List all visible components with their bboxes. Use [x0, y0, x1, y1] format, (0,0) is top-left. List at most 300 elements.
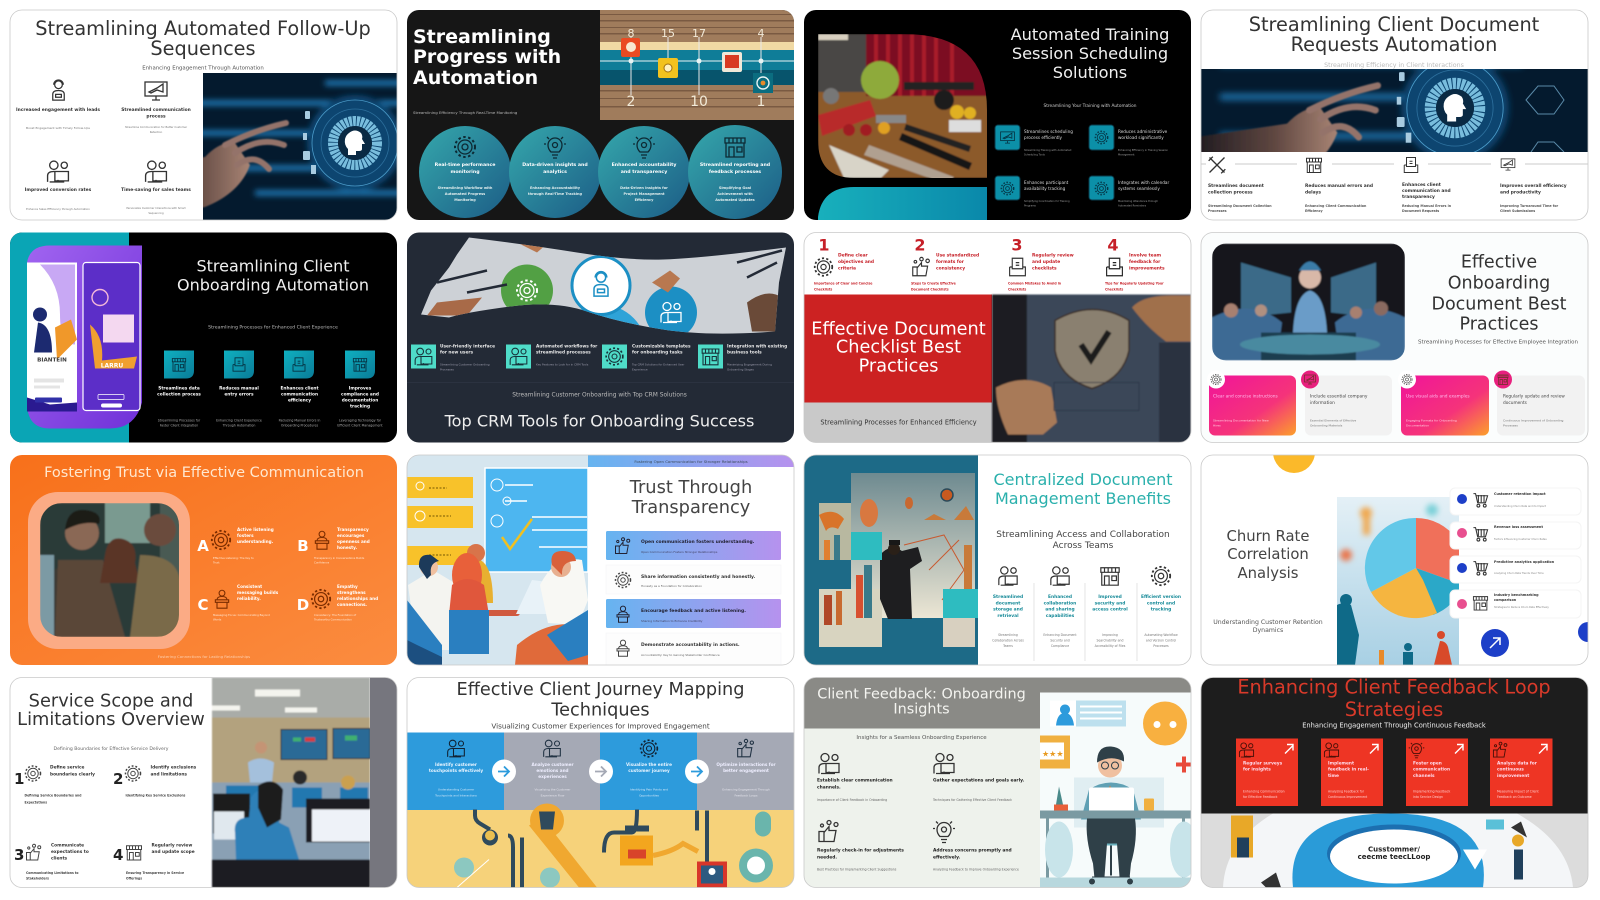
card note: Implementing Feedback: [1413, 790, 1450, 794]
card note: for Effective Feedback: [1243, 795, 1278, 799]
feature text: Improves: [349, 386, 372, 392]
row note: Sharing Information to Enhance Credibility: [641, 619, 703, 623]
icon: store: [1473, 597, 1488, 610]
image: hand touching support hologram: [1195, 41, 1588, 198]
title: Checklist Best: [836, 338, 961, 358]
benefit note: Boost Engagement with Timely Follow-Ups: [26, 126, 90, 130]
icon: hand with chart: [913, 257, 929, 276]
number: 3: [14, 846, 24, 864]
item note: Stakeholders: [26, 876, 49, 880]
benefit text: Increased engagement with leads: [16, 107, 100, 113]
step text: checklists: [1032, 266, 1057, 272]
subtitle: Defining Boundaries for Effective Service Delivery: [54, 746, 169, 752]
feature note: Streamlining Customer Onboarding: [440, 362, 490, 366]
item text: Active listening: [237, 527, 274, 532]
icon tile: [995, 176, 1020, 200]
benefit note: Compliance: [1051, 644, 1069, 648]
feature note: Top CRM Solutions for Enhanced User: [631, 362, 685, 366]
title: Session Scheduling: [1012, 44, 1168, 63]
subtitle: Insights for a Seamless Onboarding Experience: [856, 735, 987, 741]
icon: [510, 348, 527, 365]
item 3: [14, 842, 89, 880]
card note: Essential Elements of Effective: [1310, 418, 1356, 422]
icon tile: [995, 125, 1020, 150]
insight: channels: [817, 754, 893, 802]
benefit: communication: [121, 82, 191, 134]
arrow: [1370, 744, 1378, 754]
benefit text: document: [996, 600, 1020, 606]
ring caption: Cusstommer/: [1368, 846, 1420, 854]
item note: Defining Service Boundaries and: [24, 794, 81, 798]
card note: Documentation: [1406, 424, 1429, 428]
item note: Enhancing Client Communication: [1305, 204, 1367, 208]
feature text: Automated workflows for: [536, 344, 598, 350]
row note: Honesty as a Foundation for Collaboration: [641, 584, 702, 588]
item text: Streamlines document: [1208, 183, 1264, 189]
icon: [215, 590, 229, 608]
benefit note: Security and: [1050, 638, 1070, 642]
card note: Feedback on Outcome: [1497, 795, 1532, 799]
step note: Project Management: [624, 192, 665, 196]
step circle: monitoring: [419, 126, 511, 218]
illustration: phone screens: [27, 246, 142, 428]
edge button: [1578, 622, 1598, 642]
title: Centralized Document: [993, 470, 1173, 489]
step note: Visualizing the Customer: [534, 788, 571, 792]
step 4: [1105, 236, 1165, 292]
step note: Experience Flow: [541, 794, 565, 798]
icon: cart: [1473, 562, 1488, 575]
row note: Accountability: Key to Gaining Stakeholder Confidence: [641, 653, 720, 657]
subtitle: Enhancing Engagement Through Automation: [142, 66, 264, 72]
subtitle band: [804, 402, 992, 442]
step text: Data-driven insights and: [522, 162, 588, 168]
benefit text: Improved: [1098, 594, 1122, 600]
icon: [126, 766, 140, 781]
card text: Regular surveys: [1243, 760, 1283, 766]
feature text: Streamlines scheduling: [1024, 129, 1073, 134]
item note: Offerings: [126, 876, 142, 880]
list card: benchmarking: [1450, 590, 1581, 618]
ring caption: ceecme teecLLoop: [1358, 853, 1430, 861]
item text: Reduces manual errors and: [1305, 183, 1373, 189]
card: analyze data: [1490, 738, 1552, 806]
row note: Open Communication Fosters Stronger Relationships: [641, 550, 718, 554]
insight text: Gather expectations and goals early.: [933, 778, 1025, 784]
item note: Words: [213, 618, 222, 622]
icon: gear head: [815, 258, 832, 276]
title: Client Feedback: Onboarding: [817, 686, 1026, 702]
step note: Streamlining Workflow with: [438, 186, 493, 190]
step text: emotions and: [536, 768, 569, 773]
panel: Streamlining Automated Follow-Up Sequences: [16, 20, 397, 220]
item text: Improves overall efficiency: [1500, 183, 1567, 189]
icon: extinguisher: [1010, 258, 1025, 276]
card text: Revenue loss assessment: [1494, 525, 1543, 529]
item note: Improving Turnaround Time for: [1500, 204, 1558, 208]
feature text: workload significantly: [1118, 135, 1164, 140]
step text: Real-time performance: [435, 162, 495, 168]
icon: agent with laptop: [48, 161, 68, 182]
feature note: Maximizing Attendance through: [1118, 199, 1158, 203]
title: Streamlining Automated Follow-Up: [35, 17, 371, 40]
feature note: Experience: [632, 368, 648, 372]
arrow 1: [492, 760, 516, 784]
subtitle: Streamlining Efficiency Through Real-Time Monitoring: [413, 110, 518, 115]
insight note: Importance of Client Feedback in Onboarding: [817, 798, 887, 802]
title: Transparency: [631, 497, 750, 518]
item text: Identify exclusions: [150, 764, 197, 770]
step note: Feedback Loops: [734, 794, 758, 798]
panel: Streamlining Client Document Requests Automation: [1195, 10, 1588, 220]
title: Fostering Trust via Effective Communication: [44, 465, 364, 481]
arrow: [1285, 744, 1293, 754]
feature text: Integration with existing: [727, 344, 787, 350]
step note: Understanding Customer: [438, 788, 475, 792]
item note: Ensuring Transparency in Service: [126, 871, 184, 875]
card text: time: [1328, 773, 1339, 779]
icon tile: [411, 344, 436, 368]
icon: [1001, 132, 1014, 143]
item text: transparency: [1402, 194, 1435, 200]
step note: Automated Updates: [715, 198, 755, 202]
step text: Regularly review: [1032, 252, 1074, 258]
feature note: Streamlining Processes for: [158, 418, 201, 422]
title: Service Scope and: [29, 690, 193, 712]
icon: [233, 358, 245, 371]
feature text: availability tracking: [1024, 186, 1066, 191]
benefit text: Efficient version: [1141, 594, 1181, 600]
card note: Engaging Formats for Onboarding: [1406, 418, 1457, 422]
benefit text: access control: [1092, 607, 1128, 613]
feature note: Reducing Manual Errors in: [279, 418, 320, 422]
feature note: Management: [1118, 152, 1134, 156]
feature text: for onboarding tasks: [632, 350, 683, 356]
benefit note: Enhancing Document: [1043, 633, 1077, 637]
subtitle: Streamlining Your Training with Automation: [1043, 103, 1137, 109]
item note: Communicating Limitations to: [26, 871, 79, 875]
step text: Involve team: [1129, 252, 1162, 258]
icon: [1001, 182, 1014, 195]
item text: connections.: [337, 602, 367, 607]
step note: Importance of Clear and Concise: [814, 282, 872, 286]
step text: Analyze customer: [531, 762, 574, 767]
card text: feedback in real-: [1328, 767, 1369, 773]
image: timeline on wood: [600, 10, 794, 120]
row text: Open communication fosters understanding.: [641, 539, 755, 545]
subtitle: Streamlining Access and Collaboration: [996, 530, 1170, 540]
insight: concerns: [933, 822, 1019, 872]
card text: Regularly update and review: [1503, 394, 1565, 400]
item text: understanding.: [237, 539, 274, 544]
icon badge: [1207, 370, 1225, 388]
step note: Steps to Create Effective: [911, 282, 956, 286]
icon: [1498, 375, 1508, 384]
icon tile: [506, 344, 531, 368]
panel: Service Scope and Limitations Overview: [10, 678, 397, 888]
step note: Document Checklists: [911, 288, 949, 292]
panel: Client Feedback: Onboarding Insights: [804, 678, 1198, 888]
step 3: [1008, 236, 1074, 292]
step band 1: [407, 732, 504, 810]
benefit note: Sequencing: [148, 211, 164, 215]
card: review: [1494, 370, 1585, 436]
title: Insights: [893, 702, 950, 718]
insight note: Analyzing Feedback to Improve Onboarding Experience: [933, 868, 1019, 872]
feature note: Efficient Client Management: [337, 424, 383, 428]
feature: templates: [602, 344, 691, 372]
step text: improvements: [1129, 266, 1165, 272]
feature note: Simplifying Coordination for Training: [1024, 199, 1070, 203]
panel: Centralized Document Management Benefits: [804, 455, 1191, 665]
item text: Consistent: [237, 584, 262, 589]
step note: Enhancing Engagement Through: [722, 788, 770, 792]
icon: [616, 538, 630, 554]
card: visual aids: [1398, 370, 1489, 436]
step note: Opportunities: [639, 794, 659, 798]
feature: data collection: [157, 350, 201, 428]
card text: Include essential company: [1310, 394, 1368, 400]
step note: Automated Progress: [445, 192, 485, 196]
benefit text: retrieval: [997, 613, 1019, 619]
letter: A: [197, 537, 209, 555]
item note: Efficiency: [1305, 209, 1324, 213]
item text: Regularly review: [152, 842, 192, 848]
card text: improvement: [1497, 773, 1529, 779]
item text: relationships and: [337, 596, 378, 601]
panel: Top CRM Tools for Onboarding Success: [407, 232, 794, 442]
benefit: engagement: [16, 80, 100, 130]
icon tile: [698, 344, 723, 368]
image: timeline on wood: 2: [627, 94, 635, 110]
benefit: version control: [1141, 567, 1181, 648]
step note: Data-Driven Insights for: [620, 186, 668, 190]
subtitle: Streamlining Processes for Effective Employee Integration: [1418, 340, 1578, 346]
card note: Strategies to Reduce Churn Rate Effectively: [1494, 605, 1549, 609]
item: collection: [1208, 157, 1272, 213]
insight text: effectively.: [933, 854, 961, 860]
image: collage, analyst with charts: [819, 473, 978, 647]
feature text: business tools: [727, 350, 762, 356]
item text: fosters: [237, 533, 254, 538]
image: timeline on wood: 1: [757, 94, 765, 110]
title: Streamlining Client Document: [1249, 13, 1540, 36]
insight text: Establish clear communication: [817, 778, 893, 784]
feature note: Onboarding Stages: [727, 368, 754, 372]
item text: reliability.: [237, 596, 261, 601]
icon: [999, 567, 1017, 585]
row: open communication: [606, 531, 781, 560]
step note: Touchpoints and Interactions: [434, 794, 477, 798]
step text: monitoring: [450, 169, 480, 175]
illustration: team at board: [407, 455, 588, 665]
step note: Checklists: [1008, 288, 1026, 292]
row: feedback: [606, 599, 781, 628]
arrow button: [1481, 629, 1509, 657]
item text: Transparency: [337, 527, 369, 532]
title: Streamlining Client: [196, 256, 350, 276]
illustration: man at laptop: ★★★: [1042, 750, 1064, 758]
icon: [819, 820, 838, 842]
feature note: Programs: [1024, 204, 1037, 208]
image: shield under jacket: [992, 294, 1191, 442]
subtitle: Visualizing Customer Experiences for Improved Engagement: [491, 722, 710, 730]
step note: Common Mistakes to Avoid in: [1008, 282, 1062, 286]
card text: Industry benchmarking: [1494, 593, 1539, 597]
benefit note: Collaboration Across: [992, 638, 1024, 642]
icon: gear sensor: [455, 137, 475, 157]
number: 2: [914, 236, 926, 254]
feature note: Enhancing Efficiency in Training Session: [1118, 148, 1168, 152]
row: accountability: [606, 633, 781, 665]
icon: [126, 846, 142, 860]
benefit text: Streamlined: [993, 594, 1023, 600]
feature text: streamlined processes: [536, 350, 591, 356]
feature note: Onboarding Procedures: [281, 424, 319, 428]
card note: Analyzing Churn Rate Trends Over Time: [1494, 571, 1544, 575]
insight note: Techniques for Gathering Effective Client Feedback: [932, 798, 1012, 802]
title: Effective Document: [811, 320, 986, 340]
card note: Measuring Impact of Client: [1497, 790, 1539, 794]
insight note: Best Practices for Implementing Client Suggestions: [817, 868, 897, 872]
card text: Customer retention impact: [1494, 492, 1546, 496]
card text: Predictive analytics application: [1494, 560, 1555, 564]
card note: Continuous Improvement of Onboarding: [1503, 418, 1564, 422]
card text: for insights: [1243, 767, 1271, 773]
title: Effective Client Journey Mapping: [457, 680, 744, 700]
item note: Document Requests: [1402, 209, 1439, 213]
icon: [293, 358, 305, 371]
feature text: compliance and: [341, 392, 379, 398]
item A: [197, 527, 274, 564]
benefit text: collaboration: [1044, 600, 1076, 606]
feature: scheduling: [995, 125, 1073, 156]
step text: Visualize the entire: [626, 762, 672, 767]
panel: Effective Document Checklist Best Practices: [804, 232, 1191, 442]
item text: Define service: [50, 764, 85, 770]
icon: [1101, 568, 1119, 585]
card: company info: [1301, 370, 1392, 436]
benefit: collaboration: [1043, 567, 1077, 648]
arrow: [1455, 744, 1463, 754]
card: real-time feedback: [1321, 738, 1383, 806]
panel: Fostering Trust via Effective Communication: [10, 455, 397, 665]
row text: Encourage feedback and active listening.: [641, 608, 746, 614]
footer subtitle: Fostering Connections for Lasting Relationships: [158, 654, 250, 659]
icon: [1402, 374, 1412, 384]
card text: communication: [1413, 767, 1450, 773]
benefit: security: [1092, 568, 1128, 648]
benefit note: Processes: [1153, 644, 1169, 648]
image: timeline on wood: 4: [758, 27, 764, 40]
benefit note: Retention: [150, 130, 163, 134]
number: 4: [113, 846, 123, 864]
item text: openness and: [337, 539, 370, 544]
icon: [1409, 743, 1424, 758]
title: Effective: [1461, 252, 1537, 272]
item: communication: [1402, 158, 1452, 213]
step text: touchpoints effectively: [429, 768, 483, 773]
feature text: Reduces administrative: [1118, 129, 1168, 134]
feature note: Streamlining Training with Automated: [1024, 148, 1072, 152]
feature: workflows: [506, 344, 598, 368]
step text: and transparency: [621, 169, 667, 175]
card note: Analyzing Feedback for: [1328, 790, 1365, 794]
icon: [617, 606, 629, 622]
item text: collection process: [1208, 190, 1253, 196]
icon: [1095, 182, 1108, 195]
item text: Empathy: [337, 584, 358, 589]
icon: [616, 572, 630, 588]
step text: Optimize interactions for: [716, 762, 777, 767]
title: Analysis: [1238, 565, 1298, 582]
title: Strategies: [1345, 698, 1443, 721]
title: Progress with: [413, 46, 561, 68]
icon: [1239, 743, 1254, 757]
item text: boundaries clearly: [50, 772, 95, 778]
letter: C: [197, 596, 209, 614]
step text: Use standardized: [936, 252, 979, 258]
benefit text: and sharing: [1045, 607, 1075, 613]
image: timeline on wood: 10: [690, 94, 708, 110]
title: Document Best: [1432, 294, 1567, 314]
icon: [26, 766, 40, 781]
step band 3: [600, 732, 697, 810]
dot: [1457, 528, 1467, 538]
icon: agent with laptop: [146, 161, 166, 182]
item note: Consistency: The Foundation of: [314, 613, 356, 617]
item note: Confidence: [314, 560, 329, 564]
item text: messaging builds: [237, 590, 279, 595]
right strip: [370, 678, 397, 888]
icon: document: [1404, 158, 1418, 172]
item 1: [14, 764, 95, 804]
feature: manual entry: [216, 350, 262, 428]
item note: Streamlining Document Collection: [1208, 204, 1272, 208]
step note: Enhancing Accountability: [530, 186, 581, 190]
panel: Churn Rate Correlation Analysis: [1201, 431, 1598, 665]
icon: [606, 348, 623, 365]
card text: Foster open: [1413, 760, 1442, 766]
panel: Effective Onboarding Document Best Practices: [1201, 232, 1588, 442]
illustration: phone screens: LARRU: [101, 362, 123, 370]
decorative teal shape: [818, 187, 987, 220]
benefit text: capabilities: [1046, 613, 1075, 619]
number: 4: [1107, 236, 1119, 254]
feature note: Maximizing Engagement During: [727, 362, 772, 366]
step text: better engagement: [723, 768, 769, 773]
icon: [1095, 131, 1108, 144]
benefit text: tracking: [1151, 607, 1171, 613]
icon tile: [1089, 176, 1114, 200]
feature note: Scheduling Tools: [1024, 152, 1045, 156]
step note: Identifying Pain Points and: [630, 788, 668, 792]
title: Sequences: [150, 37, 256, 60]
illustration: journey pipes: [407, 804, 794, 888]
feature text: Integrates with calendar: [1118, 180, 1169, 185]
connector lines: [1201, 163, 1588, 165]
card: open channels: [1406, 738, 1468, 806]
title: Practices: [1459, 314, 1539, 334]
image: hand touching support hologram: [203, 73, 397, 220]
item text: and limitations: [150, 772, 187, 778]
icon: [415, 348, 432, 365]
image: timeline on wood: 15: [661, 27, 675, 40]
feature: admin workload: [1089, 125, 1168, 156]
card note: Streamlining Documentation for New: [1213, 418, 1269, 422]
benefit note: Accessibility of Files: [1095, 644, 1126, 648]
step circle: accountability: [598, 126, 690, 218]
